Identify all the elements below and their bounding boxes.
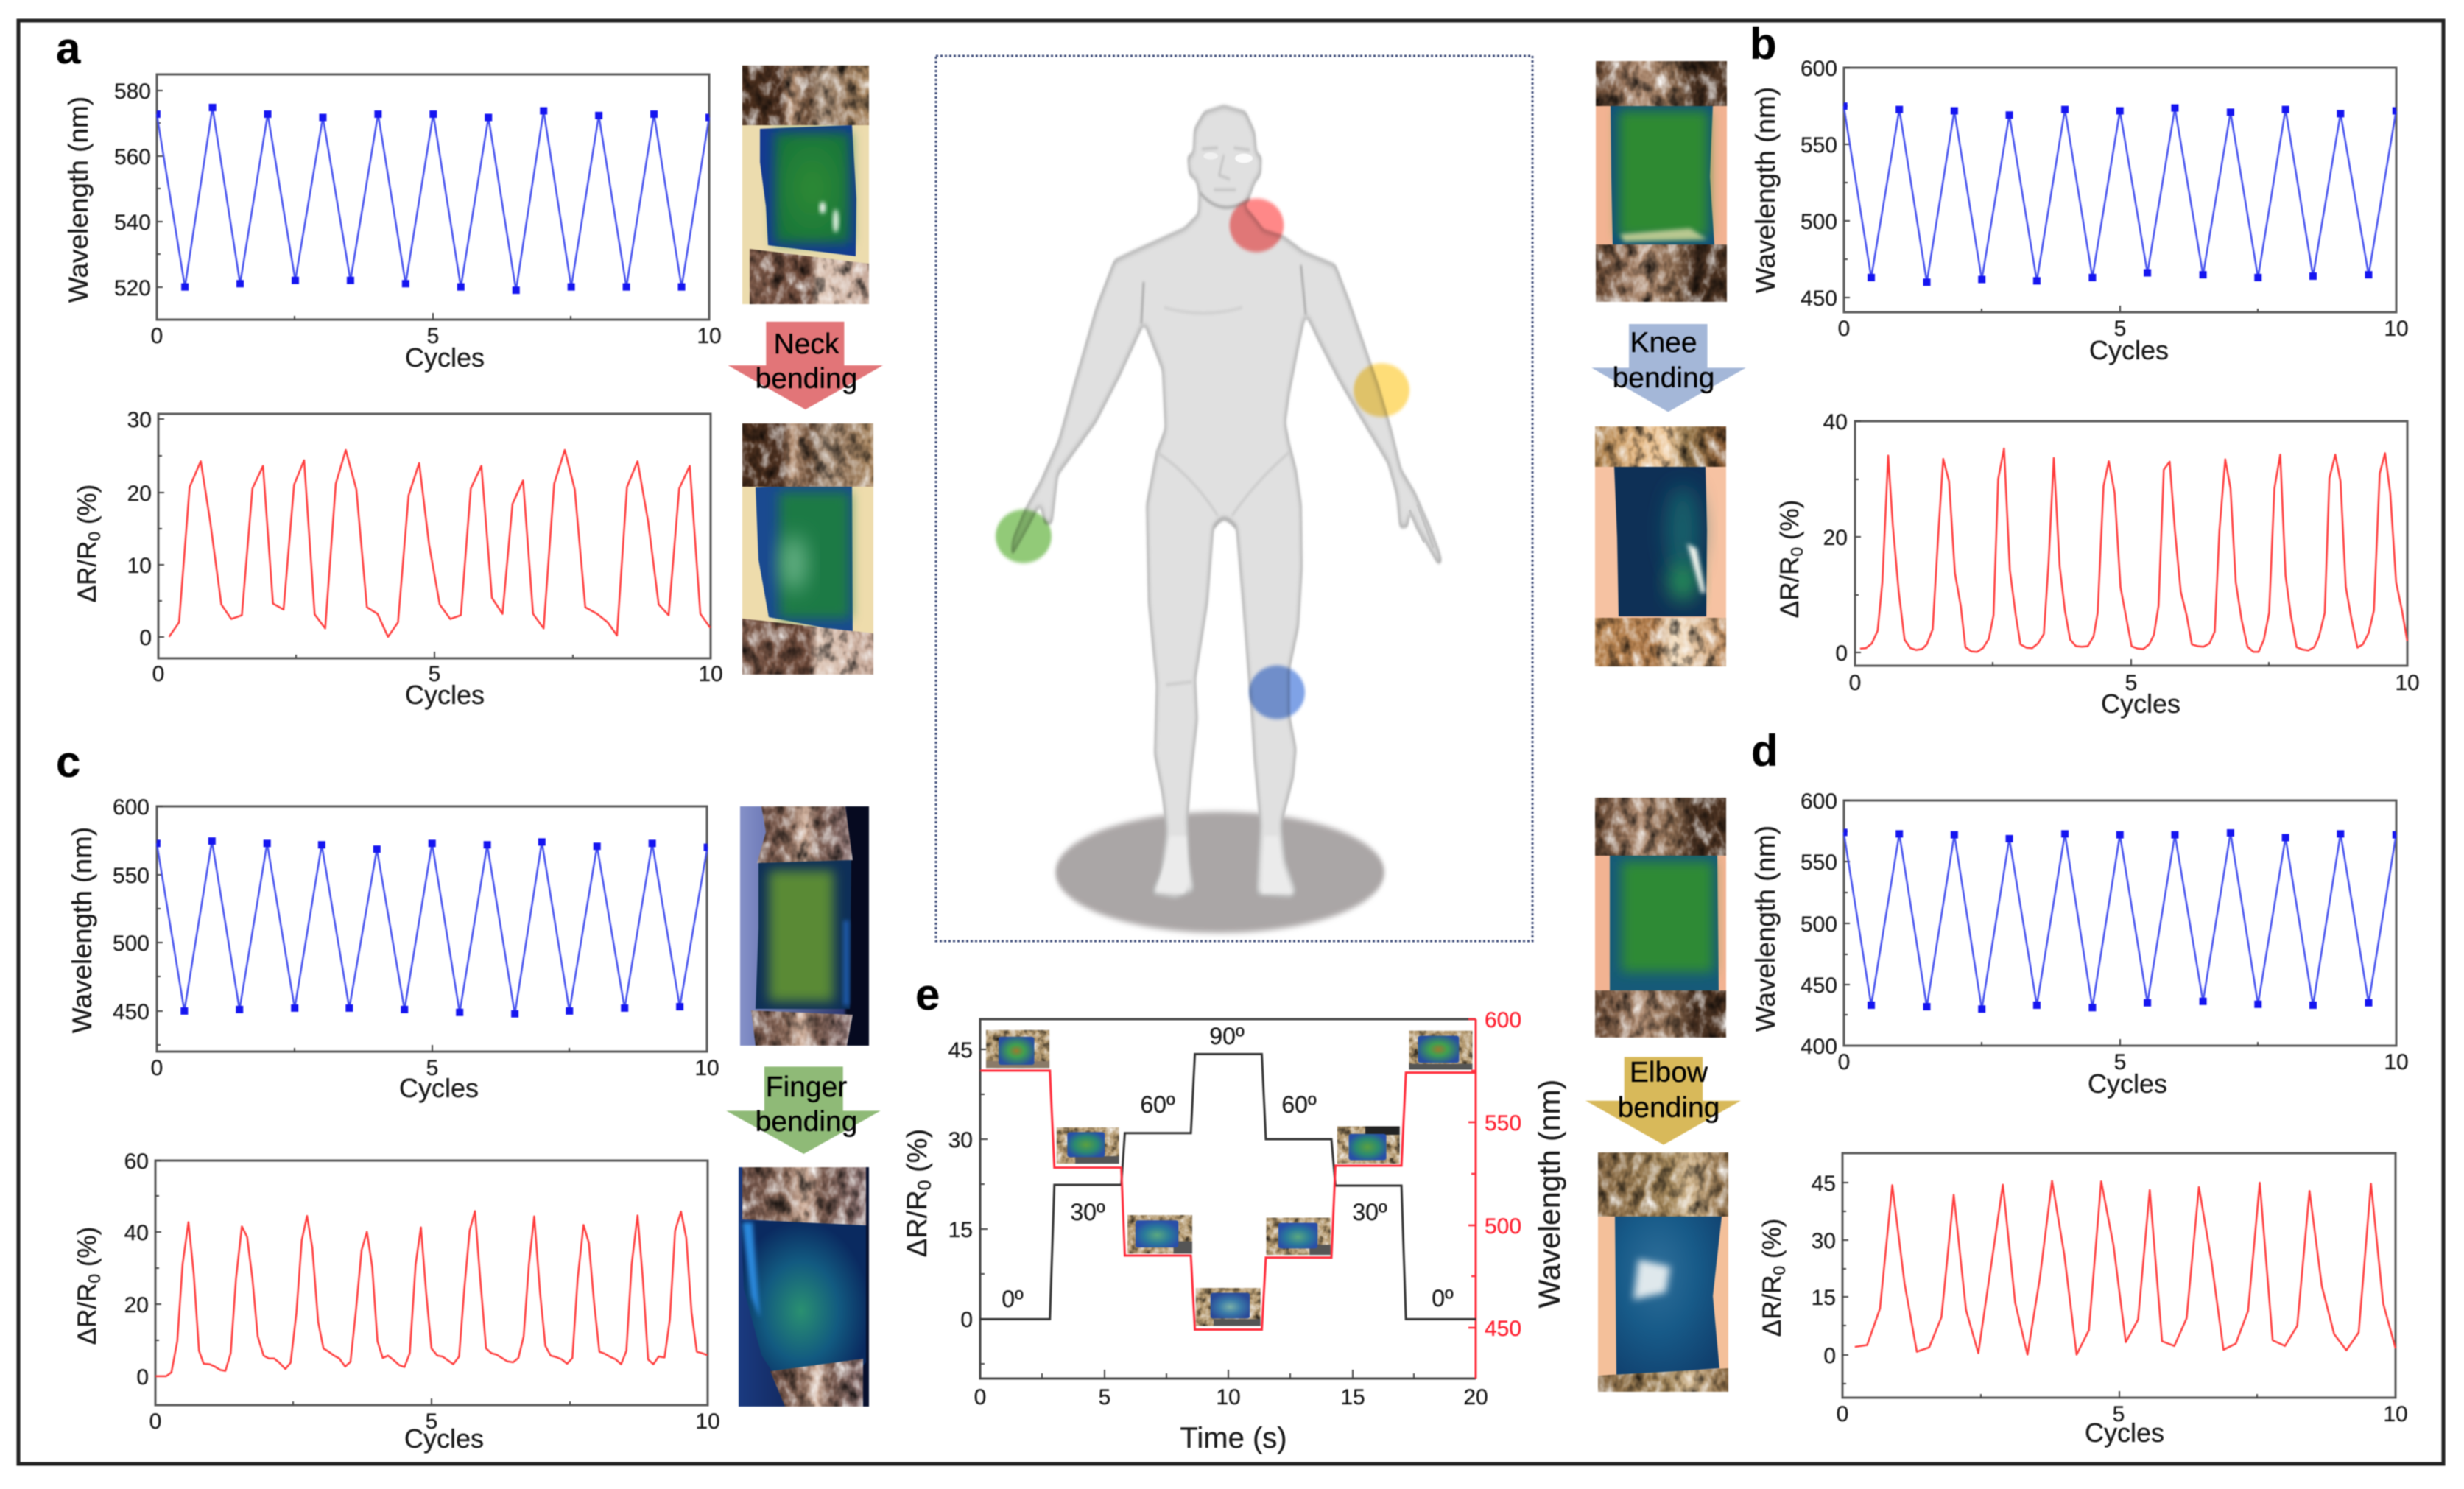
chart: resistance and wavelength vs time: Wavelength (nm)	[1532, 1080, 1566, 1308]
thumbnail: 90 degrees	[1196, 1288, 1261, 1326]
arrow: finger bending	[726, 1066, 881, 1154]
chart: resistance and wavelength vs time: 30	[948, 1128, 973, 1152]
chart: d wavelength vs cycles	[1750, 789, 2409, 1099]
chart: d resistance vs cycles: ΔR/R	[1758, 1275, 1787, 1337]
chart: d wavelength vs cycles: Wavelength (nm)	[1750, 826, 1781, 1032]
chart: b resistance vs cycles: 5	[2125, 671, 2137, 695]
chart: resistance and wavelength vs time: 10	[1216, 1385, 1241, 1409]
chart: a wavelength vs cycles: 10	[697, 324, 722, 348]
chart: a resistance vs cycles: 20	[127, 482, 152, 506]
chart: d resistance vs cycles: 15	[1812, 1286, 1836, 1310]
panel: body diagram	[936, 56, 1532, 941]
arrow: knee bending: Knee	[1630, 327, 1697, 359]
panel: b knee bending	[1591, 19, 2420, 719]
dotted frame	[936, 56, 1532, 941]
chart: d wavelength vs cycles: 0	[1838, 1050, 1850, 1074]
chart: resistance and wavelength vs time: 0	[915, 1180, 935, 1190]
chart: b resistance vs cycles: Cycles	[2101, 689, 2180, 719]
chart: a wavelength vs cycles: 520	[114, 276, 151, 300]
chart: c wavelength vs cycles: 10	[694, 1056, 719, 1080]
chart: resistance and wavelength vs time: 15	[948, 1218, 973, 1242]
chart: a resistance vs cycles: (%)	[73, 485, 102, 532]
chart: c wavelength vs cycles: Cycles	[399, 1073, 479, 1103]
chart: c resistance vs cycles: 60	[124, 1150, 149, 1174]
chart: c wavelength vs cycles: 450	[113, 1000, 149, 1024]
chart: b wavelength vs cycles	[1750, 57, 2409, 365]
chart: a wavelength vs cycles	[63, 74, 722, 373]
photo: knee sensor bent	[1595, 426, 1726, 666]
chart: c wavelength vs cycles: 500	[113, 932, 149, 956]
chart: resistance and wavelength vs time: 20	[1463, 1385, 1488, 1409]
chart: resistance and wavelength vs time: 0	[960, 1308, 973, 1332]
photo: finger sensor relaxed	[740, 806, 869, 1046]
photo: knee sensor relaxed	[1596, 61, 1727, 302]
arrow: knee bending	[1591, 324, 1746, 412]
chart: b resistance vs cycles: 10	[2395, 671, 2420, 695]
chart: b wavelength vs cycles: 5	[2114, 317, 2126, 341]
chart: resistance and wavelength vs time: Time (s)	[1180, 1422, 1287, 1454]
chart: resistance and wavelength vs time: 0º	[1002, 1286, 1024, 1312]
chart: c resistance vs cycles: 20	[124, 1293, 149, 1317]
arrow: finger bending: bending	[756, 1106, 857, 1138]
thumbnail: 30 degrees	[1057, 1127, 1119, 1164]
arrow: neck bending: Neck	[774, 328, 839, 360]
panel letter c: c	[56, 737, 80, 786]
chart: c wavelength vs cycles: Wavelength (nm)	[67, 827, 97, 1033]
thumbnail: 0 degrees	[986, 1030, 1049, 1068]
arrow: neck bending: bending	[756, 363, 857, 395]
chart: a resistance vs cycles: 0	[85, 532, 104, 541]
chart: b resistance vs cycles: 40	[1823, 410, 1848, 434]
chart: resistance and wavelength vs time: 90º	[1209, 1023, 1245, 1049]
arrow: elbow bending	[1585, 1057, 1741, 1145]
chart: d wavelength vs cycles: Cycles	[2088, 1069, 2167, 1099]
chart: b wavelength vs cycles: 10	[2384, 317, 2409, 341]
thumbnail: 60 degrees	[1127, 1215, 1192, 1253]
chart: c resistance vs cycles: 0	[149, 1409, 161, 1434]
arrow: elbow bending: bending	[1618, 1092, 1719, 1124]
marker: neck	[1230, 199, 1284, 252]
chart: c resistance vs cycles: 0	[85, 1274, 104, 1284]
chart: c wavelength vs cycles: 0	[151, 1056, 163, 1080]
arrow: elbow bending: Elbow	[1630, 1057, 1708, 1088]
chart: a wavelength vs cycles: 560	[114, 145, 151, 169]
chart: a resistance vs cycles: 0	[139, 626, 152, 650]
chart: d resistance vs cycles: 5	[2113, 1402, 2125, 1426]
marker: elbow	[1354, 363, 1409, 417]
chart: resistance and wavelength vs time: (%)	[902, 1129, 933, 1180]
chart: c resistance vs cycles: 0	[136, 1365, 149, 1390]
chart: c wavelength vs cycles: 5	[426, 1056, 438, 1080]
chart: b resistance vs cycles: 0	[1787, 547, 1806, 557]
chart: d resistance vs cycles: (%)	[1758, 1219, 1787, 1266]
chart: b resistance vs cycles	[1775, 410, 2420, 719]
chart: c resistance vs cycles: 10	[695, 1409, 720, 1434]
panel letter a: a	[56, 24, 81, 73]
chart: d resistance vs cycles: 0	[1770, 1266, 1789, 1275]
chart: a resistance vs cycles: 10	[127, 554, 152, 578]
photo: neck sensor relaxed	[742, 66, 869, 304]
marker: knee	[1249, 666, 1305, 719]
chart: d resistance vs cycles: 0	[1837, 1402, 1848, 1426]
panel: e angle response	[902, 970, 1566, 1454]
chart: c resistance vs cycles	[73, 1150, 720, 1454]
chart: a wavelength vs cycles: 5	[427, 324, 439, 348]
thumbnail: 30 degrees return	[1337, 1127, 1400, 1164]
marker: finger	[996, 510, 1052, 563]
chart: d wavelength vs cycles: 450	[1801, 974, 1837, 998]
chart: resistance and wavelength vs time: ΔR/R	[902, 1190, 933, 1257]
chart: c resistance vs cycles: 5	[426, 1409, 437, 1434]
chart: c resistance vs cycles: 40	[124, 1221, 149, 1245]
chart: a wavelength vs cycles: 580	[114, 80, 151, 104]
chart: b wavelength vs cycles: 0	[1838, 317, 1850, 341]
chart: a resistance vs cycles: 0	[152, 662, 164, 686]
chart: d wavelength vs cycles: 550	[1801, 851, 1837, 875]
chart: d wavelength vs cycles: 600	[1801, 789, 1837, 814]
arrow: finger bending: Finger	[766, 1071, 847, 1103]
chart: d wavelength vs cycles: 5	[2114, 1050, 2126, 1074]
chart: resistance and wavelength vs time: 60º	[1281, 1091, 1317, 1118]
fingers of the right hand	[1409, 504, 1434, 548]
chart: b resistance vs cycles: 20	[1823, 526, 1848, 550]
chart: d resistance vs cycles: Cycles	[2085, 1418, 2164, 1448]
thumbnail: 0 degrees return	[1409, 1031, 1472, 1069]
panel letter d: d	[1751, 726, 1778, 775]
chart: resistance and wavelength vs time: 15	[1340, 1385, 1365, 1409]
chart: a resistance vs cycles: 30	[127, 408, 152, 432]
chart: c resistance vs cycles: ΔR/R	[73, 1284, 102, 1345]
chart: resistance and wavelength vs time: 550	[1485, 1111, 1521, 1136]
chart: b wavelength vs cycles: Cycles	[2089, 335, 2169, 365]
chart: resistance and wavelength vs time: 60º	[1140, 1091, 1175, 1118]
chart: d wavelength vs cycles: 500	[1801, 912, 1837, 937]
chart: b resistance vs cycles: 0	[1849, 671, 1861, 695]
chart: c wavelength vs cycles	[67, 795, 719, 1103]
chart: resistance and wavelength vs time: 0º	[1432, 1285, 1454, 1312]
chart: resistance and wavelength vs time	[902, 1008, 1566, 1454]
human body figure	[1010, 105, 1443, 899]
photo: elbow sensor bent	[1598, 1152, 1728, 1392]
chart: resistance and wavelength vs time: 30º	[1352, 1199, 1387, 1225]
photo: finger sensor bent	[739, 1167, 869, 1407]
feet highlights	[1156, 837, 1292, 893]
chart: resistance and wavelength vs time: 500	[1485, 1214, 1521, 1239]
chart: d resistance vs cycles: 10	[2383, 1402, 2408, 1426]
chart: resistance and wavelength vs time: 5	[1099, 1385, 1110, 1409]
photo: neck sensor bent	[742, 423, 873, 675]
chart: resistance and wavelength vs time: 45	[948, 1038, 973, 1063]
chart: b resistance vs cycles: 0	[1835, 641, 1848, 666]
chart: a wavelength vs cycles: Wavelength (nm)	[63, 96, 94, 303]
chart: d wavelength vs cycles: 10	[2384, 1050, 2409, 1074]
chart: a resistance vs cycles: ΔR/R	[73, 541, 102, 602]
chart: a resistance vs cycles: 10	[698, 662, 723, 686]
panel: d elbow bending	[1585, 726, 2409, 1448]
chart: c resistance vs cycles: (%)	[73, 1227, 102, 1274]
floor shadow	[1055, 812, 1384, 933]
chart: b wavelength vs cycles: 600	[1801, 57, 1837, 81]
chart: d resistance vs cycles: 45	[1812, 1172, 1836, 1196]
chart: d resistance vs cycles: 30	[1812, 1229, 1836, 1253]
arrow: knee bending: bending	[1613, 362, 1714, 394]
chart: b resistance vs cycles: ΔR/R	[1775, 557, 1804, 618]
chart: b resistance vs cycles: (%)	[1775, 500, 1804, 547]
chart: resistance and wavelength vs time: 600	[1485, 1008, 1521, 1032]
chart: a resistance vs cycles: 5	[429, 662, 440, 686]
chart: b wavelength vs cycles: 450	[1801, 286, 1837, 311]
panel: a neck bending	[56, 24, 883, 710]
chart: b wavelength vs cycles: Wavelength (nm)	[1750, 87, 1781, 293]
panel letter b: b	[1750, 19, 1777, 68]
photo: elbow sensor relaxed	[1595, 798, 1726, 1038]
chart: b wavelength vs cycles: 500	[1801, 210, 1837, 234]
chart: b wavelength vs cycles: 550	[1801, 133, 1837, 158]
chart: resistance and wavelength vs time: 0	[974, 1385, 986, 1409]
chart: d resistance vs cycles: 0	[1823, 1344, 1836, 1368]
panel letter e: e	[915, 970, 940, 1019]
chart: c wavelength vs cycles: 550	[113, 864, 149, 888]
thumbnail: 60 degrees return	[1267, 1218, 1331, 1255]
chart: a wavelength vs cycles: Cycles	[405, 342, 485, 373]
chart: a resistance vs cycles	[73, 408, 723, 710]
panel: c finger bending	[56, 737, 881, 1454]
chart: a wavelength vs cycles: 0	[151, 324, 163, 348]
chart: resistance and wavelength vs time: 30º	[1070, 1199, 1105, 1225]
chart: d resistance vs cycles	[1758, 1153, 2408, 1448]
chart: a resistance vs cycles: Cycles	[405, 680, 485, 710]
chart: d wavelength vs cycles: 400	[1801, 1035, 1837, 1059]
chart: resistance and wavelength vs time: 450	[1485, 1317, 1521, 1341]
arrow: neck bending	[728, 322, 883, 409]
chart: a wavelength vs cycles: 540	[114, 211, 151, 235]
chart: c wavelength vs cycles: 600	[113, 795, 149, 820]
chart: c resistance vs cycles: Cycles	[404, 1423, 484, 1454]
